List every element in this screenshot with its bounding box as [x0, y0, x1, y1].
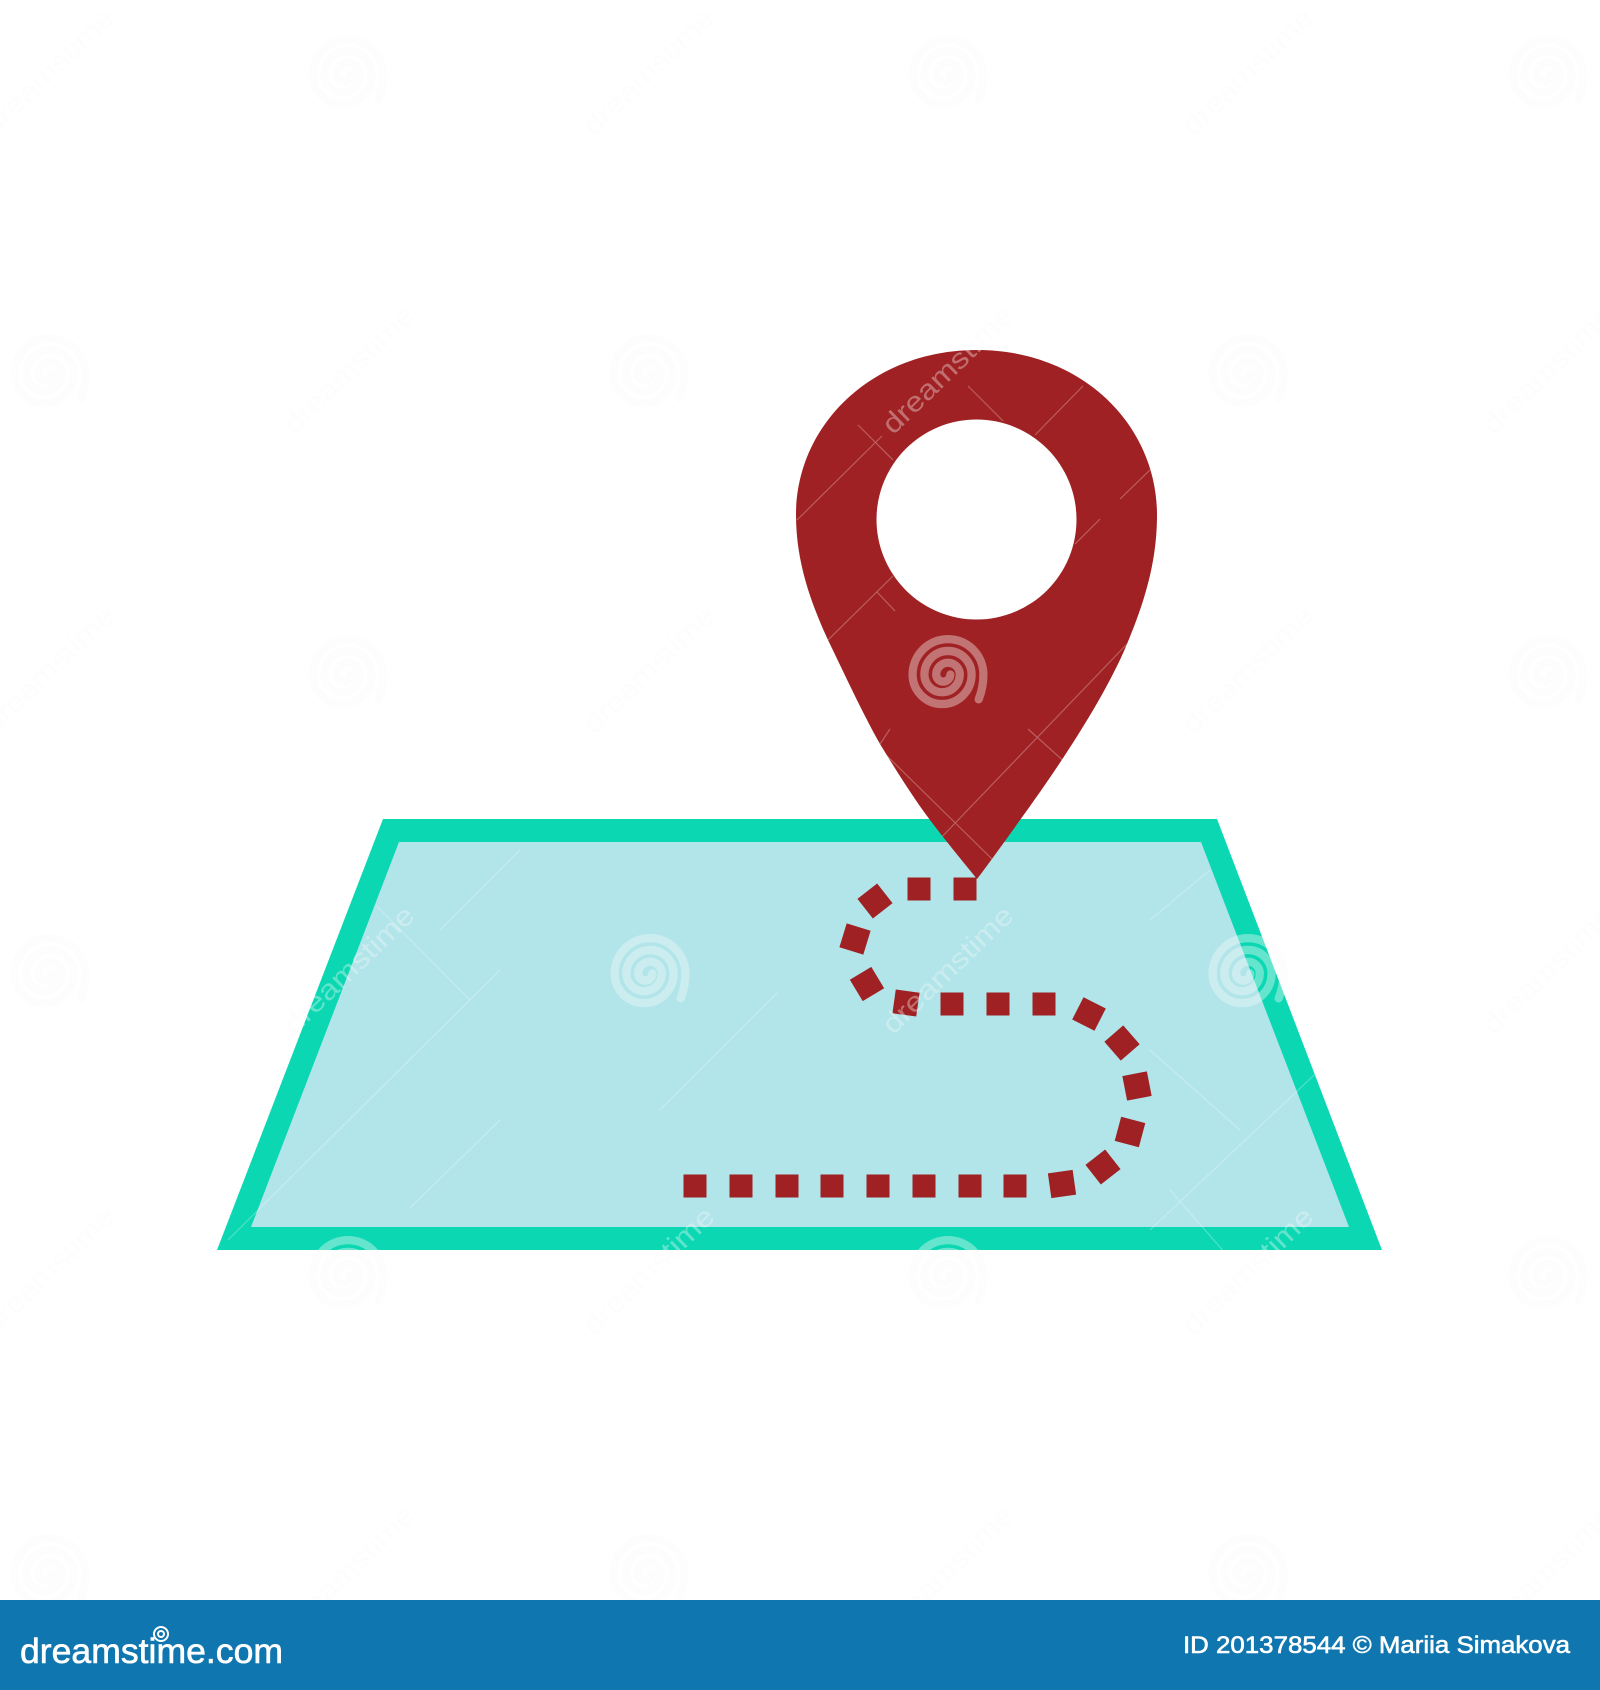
- map surface: [251, 842, 1349, 1227]
- watermark text: dreamstime: [577, 1, 721, 142]
- dotted route: [684, 878, 1152, 1198]
- logo text: dreamstime.com: [20, 1632, 283, 1671]
- image id and credit: ID 201378544 © Mariia Simakova: [1183, 1632, 1571, 1659]
- map border: [217, 819, 1382, 1250]
- watermark text: dreamstime: [1476, 1499, 1600, 1640]
- watermark text: dreamstime: [277, 299, 421, 440]
- watermark text: dreamstime: [1476, 299, 1600, 440]
- watermark text: dreamstime: [1176, 1, 1320, 142]
- watermark text: dreamstime: [876, 1499, 1020, 1640]
- icon: location pin: [796, 350, 1157, 879]
- watermark text: dreamstime: [277, 1499, 421, 1640]
- watermark text: dreamstime: [876, 299, 1020, 440]
- watermark text: dreamstime: [577, 1200, 721, 1341]
- watermark text: dreamstime: [1176, 599, 1320, 740]
- watermark text: dreamstime: [577, 599, 721, 740]
- watermark text: dreamstime: [1176, 1200, 1320, 1341]
- logo spiral: [154, 1627, 168, 1641]
- pin hole: [876, 420, 1076, 620]
- pin body: [796, 350, 1157, 879]
- watermark text: dreamstime: [876, 899, 1020, 1040]
- banner background: [0, 1600, 1600, 1690]
- map: [217, 819, 1382, 1250]
- watermark text: dreamstime: [1476, 899, 1600, 1040]
- footer banner: [0, 1600, 1600, 1690]
- watermark text: dreamstime: [277, 899, 421, 1040]
